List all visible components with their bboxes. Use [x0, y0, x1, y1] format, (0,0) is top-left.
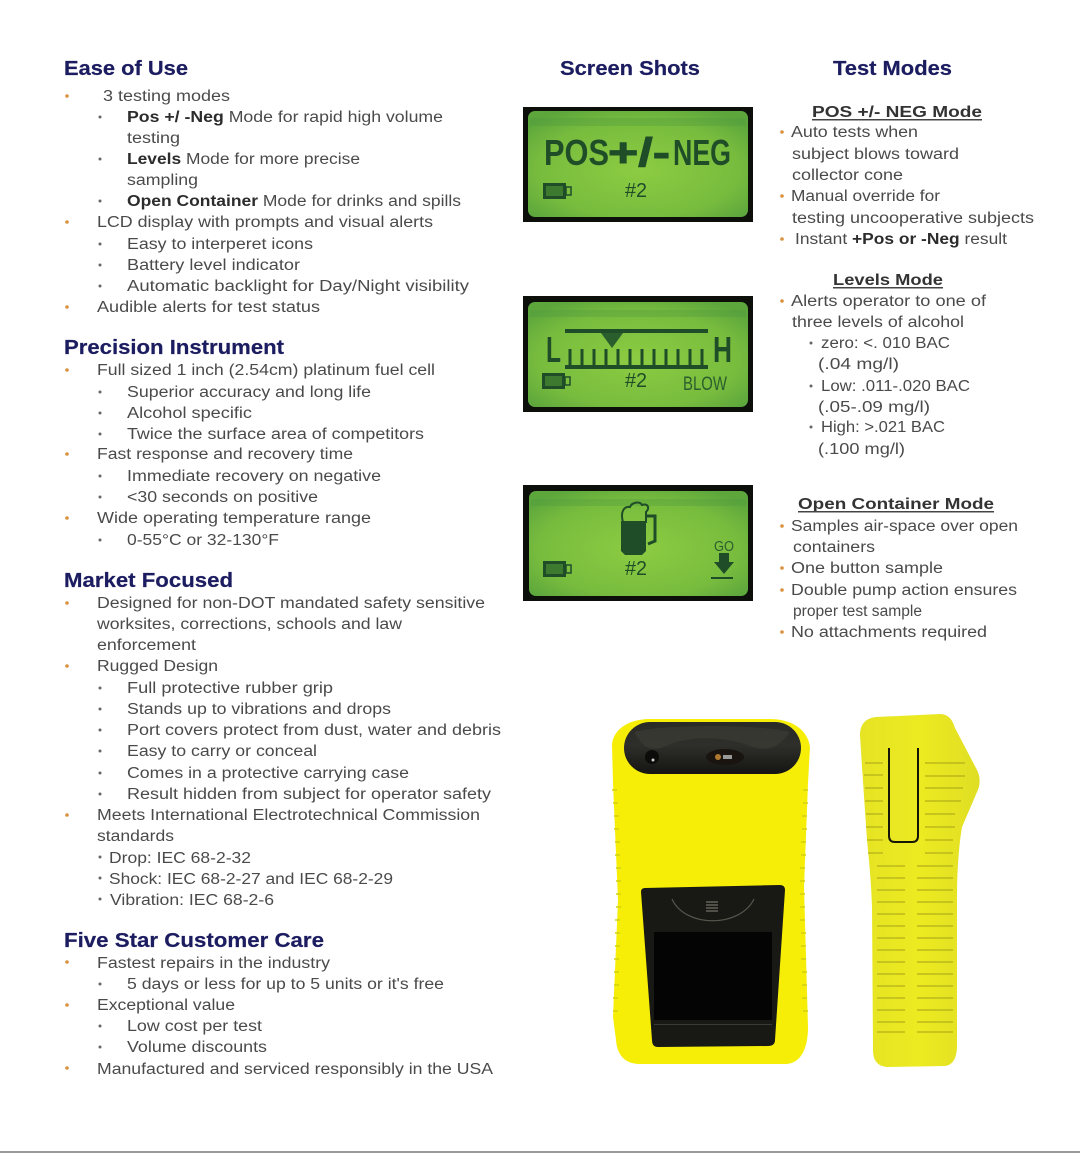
illustration: yellow device, back view [612, 719, 810, 1064]
screen: Levels LCD [523, 296, 753, 412]
list: customer care features: Low cost per test [127, 1018, 263, 1035]
subheading: Levels Mode: Levels Mode [833, 272, 943, 289]
list: precision instrument features: Fast response and recovery time [97, 446, 353, 463]
screen: Open Container LCD [523, 485, 753, 601]
list: POS +/- NEG details: testing uncooperative subjects [792, 210, 1034, 227]
panel: Ease of Use [64, 58, 469, 316]
list: customer care features: Exceptional value [97, 997, 235, 1014]
list: precision instrument features [65, 362, 435, 549]
icon: level pointer [601, 333, 623, 348]
list: ease of use features: testing [127, 130, 180, 147]
upper grip ribs [864, 763, 965, 853]
screen: Levels LCD: H [713, 329, 732, 370]
mouthpiece recess [624, 722, 801, 774]
list: Levels details [780, 293, 987, 458]
list: ease of use features: sampling [127, 172, 198, 189]
list: ease of use features: Battery level indicator [127, 257, 300, 274]
panel: Five Star Customer Care [64, 930, 494, 1078]
breath inlet [706, 749, 744, 765]
panel: Open Container Mode [780, 496, 1018, 641]
list: market focused features: standards [97, 828, 174, 845]
list: precision instrument features: <30 seconds on positive [127, 489, 318, 506]
screen: POS +/- NEG LCD: +/- [608, 131, 670, 175]
list: precision instrument features: Full sized 1 inch (2.54cm) platinum fuel cell [97, 362, 435, 379]
panel: Levels Mode [780, 272, 987, 458]
list: Levels details: (.100 mg/l) [818, 441, 905, 458]
list: Open Container details: No attachments required [791, 624, 987, 641]
heading: Screen Shots: Screen Shots [560, 58, 700, 80]
panel: POS +/- NEG Mode [780, 104, 1034, 248]
list: market focused features: Port covers protect from dust, water and debris [127, 722, 501, 739]
list: Open Container details [780, 518, 1018, 641]
list: Open Container details: Double pump action ensures [791, 582, 1017, 599]
screen: Open Container LCD: GO [714, 538, 734, 555]
list: Open Container details: Samples air-space over open [791, 518, 1018, 535]
list: ease of use features: Levels Mode for more precise [127, 151, 360, 168]
list: Open Container details: proper test sample [793, 603, 922, 620]
icon: battery [542, 373, 570, 389]
panel: Precision Instrument [64, 337, 435, 549]
list: Levels details: three levels of alcohol [792, 314, 964, 331]
list: market focused features: Vibration: IEC 68-2-6 [110, 892, 274, 909]
icon: beer mug [621, 503, 655, 555]
list: market focused features: Rugged Design [97, 658, 218, 675]
sensor port [645, 750, 659, 764]
list: precision instrument features: Immediate recovery on negative [127, 468, 381, 485]
list: precision instrument features: Superior accuracy and long life [127, 384, 371, 401]
list: ease of use features [65, 88, 469, 316]
list: POS +/- NEG details: Manual override for [791, 188, 940, 205]
list: market focused features: Shock: IEC 68-2-27 and IEC 68-2-29 [109, 871, 393, 888]
list: precision instrument features: Alcohol specific [127, 405, 252, 422]
bottom rule [0, 1151, 1080, 1153]
icon: down arrow [711, 553, 734, 579]
subheading: Open Container Mode: Open Container Mode [798, 496, 994, 513]
icon: battery [543, 561, 571, 577]
list: customer care features [65, 955, 494, 1078]
list: Levels details: Low: .011-.020 BAC [821, 378, 970, 395]
screen: Levels LCD: L [546, 329, 561, 370]
screen: POS +/- NEG LCD: POS [544, 132, 609, 173]
list: precision instrument features: Wide operating temperature range [97, 510, 371, 527]
list: Levels details: (.05-.09 mg/l) [818, 399, 930, 416]
level scale ticks [570, 349, 702, 365]
heading: Precision Instrument: Precision Instrument [64, 337, 284, 359]
icon: battery [543, 183, 571, 199]
list: precision instrument features: Twice the surface area of competitors [127, 426, 424, 443]
list: market focused features: Full protective rubber grip [127, 680, 333, 697]
list: customer care features: Fastest repairs in the industry [97, 955, 330, 972]
list: market focused features: Stands up to vibrations and drops [127, 701, 391, 718]
list: Open Container details: containers [793, 539, 875, 556]
list: market focused features: Result hidden from subject for operator safety [127, 786, 491, 803]
list: market focused features: worksites, corrections, schools and law [96, 616, 403, 633]
list: precision instrument features: 0-55°C or 32-130°F [127, 532, 279, 549]
heading: Ease of Use: Ease of Use [64, 58, 188, 80]
side grip notches [612, 790, 808, 1011]
belt clip [889, 748, 918, 842]
list: customer care features: Manufactured and serviced responsibly in the USA [97, 1061, 494, 1078]
list: customer care features: 5 days or less for up to 5 units or it's free [127, 976, 444, 993]
subheading: POS +/- NEG Mode: POS +/- NEG Mode [812, 104, 982, 121]
list: market focused features: Drop: IEC 68-2-32 [109, 850, 251, 867]
list: market focused features: Easy to carry or conceal [127, 743, 317, 760]
list: POS +/- NEG details: subject blows toward [792, 146, 959, 163]
list: Levels details: (.04 mg/l) [818, 356, 899, 373]
list: POS +/- NEG details [780, 124, 1034, 248]
heading: Test Modes: Test Modes [833, 58, 952, 80]
list: Levels details: High: >.021 BAC [821, 419, 945, 436]
list: market focused features: Meets International Electrotechnical Commission [97, 807, 480, 824]
list: POS +/- NEG details: Instant +Pos or -Neg result [795, 231, 1008, 248]
list: market focused features: Comes in a protective carrying case [127, 765, 409, 782]
screen: Levels LCD: #2 [625, 370, 647, 392]
list: ease of use features: Easy to interperet icons [127, 236, 313, 253]
screen: Open Container LCD: #2 [625, 558, 647, 580]
list: ease of use features: Open Container Mode for drinks and spills [127, 193, 461, 210]
list: customer care features: Volume discounts [127, 1039, 267, 1056]
illustration: yellow device, side view [860, 714, 980, 1067]
list: POS +/- NEG details: Auto tests when [791, 124, 918, 141]
list: Levels details: Alerts operator to one of [791, 293, 987, 310]
screen: POS +/- NEG LCD: #2 [625, 180, 647, 202]
lower grip ribs [877, 866, 953, 1032]
heading: Market Focused: Market Focused [64, 570, 233, 592]
battery door [641, 885, 785, 1047]
list: ease of use features: Audible alerts for test status [97, 299, 320, 316]
list: ease of use features: Automatic backlight for Day/Night visibility [127, 278, 469, 295]
list: ease of use features: LCD display with prompts and visual alerts [97, 214, 433, 231]
list: ease of use features: Pos +/ -Neg Mode for rapid high volume [127, 109, 443, 126]
screen: POS +/- NEG LCD: NEG [673, 132, 731, 173]
list: market focused features: Designed for non-DOT mandated safety sensitive [97, 595, 485, 612]
list: market focused features: enforcement [97, 637, 197, 654]
list: Levels details: zero: <. 010 BAC [821, 335, 950, 352]
heading: Five Star Customer Care: Five Star Customer Care [64, 930, 324, 952]
screen: POS +/- NEG LCD [523, 107, 753, 222]
screen: Levels LCD: BLOW [683, 374, 727, 395]
list: POS +/- NEG details: collector cone [792, 167, 903, 184]
panel: Market Focused [64, 570, 501, 909]
list: ease of use features: 3 testing modes [103, 88, 230, 105]
list: Open Container details: One button sample [791, 560, 943, 577]
list: market focused features [65, 595, 501, 909]
